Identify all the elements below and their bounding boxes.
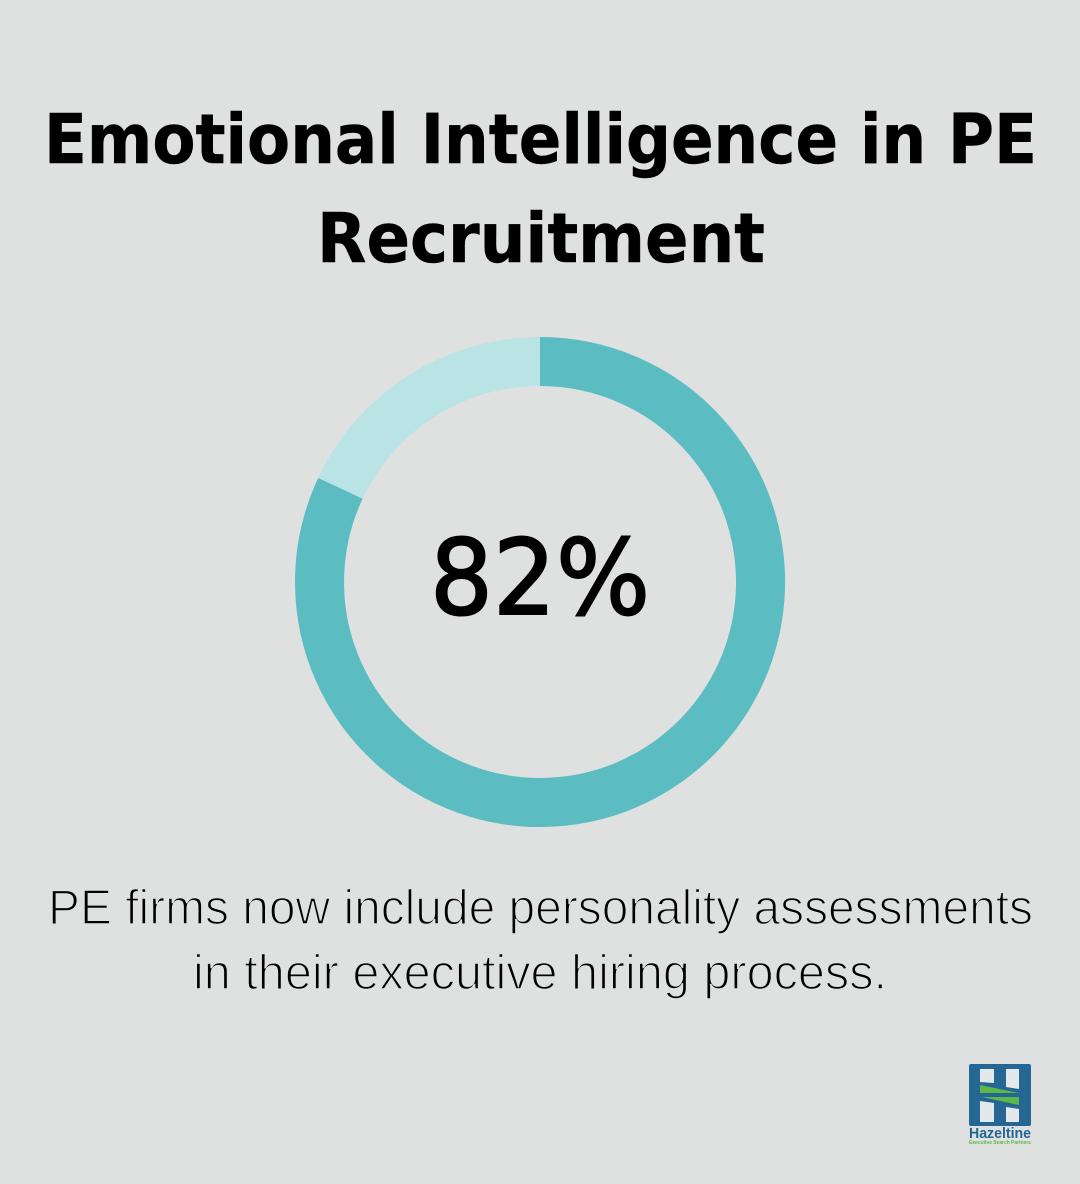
title: Recruitment xyxy=(317,199,765,279)
logo: Hazeltine xyxy=(969,1064,1031,1146)
description text: in their executive hiring process. xyxy=(193,946,887,1000)
logo: Hazeltine: Hazeltine xyxy=(969,1125,1031,1142)
donut value: 82% xyxy=(430,517,650,639)
logo: Hazeltine: Executive Search Partners xyxy=(969,1140,1031,1146)
description text xyxy=(48,881,1033,1000)
donut chart: 82% xyxy=(320,361,761,802)
title xyxy=(44,100,1037,279)
description text: PE firms now include personality assessments xyxy=(48,881,1033,935)
